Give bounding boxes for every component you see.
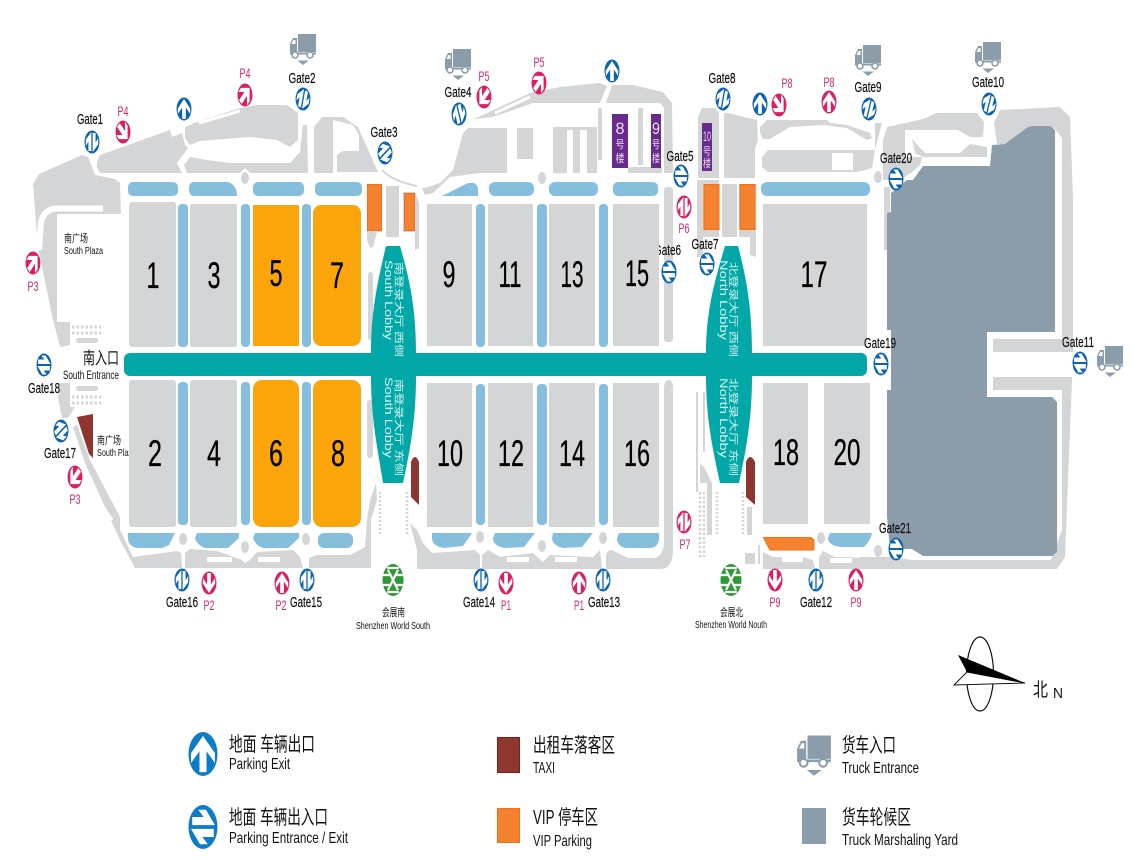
P1 west: P1 — [501, 597, 511, 613]
compass: N — [1053, 685, 1063, 702]
metro station south: 会展南 — [382, 606, 405, 619]
truck marshaling yard — [887, 126, 1057, 556]
gate 7 — [692, 236, 718, 276]
hall 9 — [427, 204, 472, 346]
gate 9: Gate9 — [854, 79, 882, 96]
building 8: 楼 — [616, 151, 624, 165]
gate 5 — [666, 148, 694, 188]
hall 20 — [824, 383, 870, 524]
hall 16 — [613, 383, 659, 527]
north lobby east labels: 北登录大厅 东侧 — [727, 378, 739, 476]
south lobby west labels: South Lobby — [382, 260, 394, 341]
gate 18 — [28, 354, 60, 397]
south lobby east labels: 南登录大厅 东侧 — [392, 379, 404, 476]
P9 west: P9 — [770, 594, 781, 610]
hall 7 — [313, 205, 361, 346]
legend: VIP parking: VIP 停车区 — [533, 806, 598, 829]
P9 east — [849, 568, 863, 610]
legend: parking exit: Parking Exit — [229, 756, 290, 773]
P8 east — [822, 74, 836, 114]
gate 9 — [854, 79, 882, 122]
hall 3 — [190, 204, 237, 347]
metro station south — [356, 564, 430, 632]
hall 17: 17 — [800, 254, 828, 295]
hall 10: 10 — [437, 433, 463, 474]
hall 13: 13 — [560, 254, 584, 295]
P9 west — [768, 568, 782, 610]
exhibition halls — [129, 202, 870, 527]
P2 west — [202, 572, 216, 613]
gate 3: Gate3 — [370, 124, 398, 141]
central teal concourse with lobbies — [124, 246, 867, 483]
label: south plaza south — [97, 433, 136, 459]
gate 1: Gate1 — [77, 111, 103, 128]
legend: truck marshaling yard: 货车轮候区 — [842, 806, 911, 829]
gate 1 — [77, 111, 103, 154]
gate 15: Gate15 — [290, 594, 322, 611]
legend: truck entrance: 货车入口 — [842, 734, 896, 757]
gate 17 — [44, 417, 76, 462]
legend: parking exit: 地面 车辆出口 — [229, 733, 315, 756]
label: south plaza south: South Plaza — [97, 448, 136, 459]
P3 north: P3 — [28, 278, 39, 294]
gate 14 — [463, 568, 495, 611]
gate 11 — [1062, 334, 1094, 374]
legend: truck marshaling yard: Truck Marshaling Yard — [842, 832, 958, 849]
gate 21 — [879, 520, 911, 560]
P2 west: P2 — [204, 597, 215, 613]
P2 east: P2 — [276, 597, 287, 613]
metro station north — [695, 564, 767, 631]
truck icon: gate 11 — [1097, 346, 1123, 377]
hall 14: 14 — [559, 433, 585, 474]
legend: taxi: 出租车落客区 — [533, 734, 615, 757]
gate 13 — [588, 568, 620, 611]
gate 2 — [288, 70, 316, 111]
label: south plaza north — [64, 231, 103, 257]
hall 4 — [190, 380, 237, 527]
hall 11 — [488, 204, 533, 346]
P6: P6 — [678, 220, 690, 236]
gate 17: Gate17 — [44, 445, 76, 462]
gate 11: Gate11 — [1062, 334, 1094, 351]
gate 4 — [444, 84, 472, 127]
P8 west — [770, 75, 793, 119]
gate 3 — [370, 124, 398, 167]
label: south entrance: 南入口 — [83, 349, 119, 368]
hall 11: 11 — [498, 254, 522, 295]
legend: VIP parking — [498, 806, 598, 850]
P7 — [677, 510, 691, 552]
P9 east: P9 — [850, 594, 862, 610]
hall 12: 12 — [498, 433, 524, 474]
hall 2 — [129, 380, 176, 527]
compass: 北 — [1033, 679, 1048, 701]
gate 6 icon — [662, 260, 676, 284]
truck icon: gate 4 — [445, 49, 471, 80]
legend: truck entrance — [797, 734, 919, 777]
P4 west: P4 — [118, 103, 129, 119]
metro station north: 会展北 — [720, 606, 743, 619]
hall 18 — [763, 383, 808, 524]
gate 10 — [972, 74, 1004, 117]
building 9: 9 — [652, 119, 660, 138]
P3 north — [24, 249, 42, 294]
legend: taxi — [498, 734, 615, 777]
gate 20: Gate20 — [880, 150, 912, 167]
hall 17 — [763, 204, 867, 346]
building 10 — [702, 123, 712, 171]
north lobby west labels: 北登录大厅 西侧 — [727, 262, 739, 357]
north lobby west labels — [717, 260, 739, 357]
hall 7: 7 — [330, 255, 344, 296]
building 8 — [612, 114, 628, 168]
legend: taxi: TAXI — [533, 760, 555, 777]
label: south entrance: South Entrance — [63, 368, 119, 382]
VIP parking areas — [368, 184, 814, 550]
south lobby west labels — [382, 260, 404, 357]
taxi drop-off areas — [77, 414, 755, 505]
hall 8 — [313, 380, 361, 527]
P1 east — [572, 572, 586, 613]
hall 14 — [549, 383, 595, 527]
gate 16 — [166, 568, 198, 611]
building 10: 10 — [703, 128, 711, 144]
P3 south — [66, 463, 84, 507]
parking exit centre — [605, 60, 619, 82]
gate 2: Gate2 — [288, 70, 316, 87]
P8 west: P8 — [782, 75, 793, 91]
north lobby west labels: North Lobby — [717, 260, 729, 341]
label: south plaza north: 南广场 — [64, 231, 88, 245]
north lobby east labels: North Lobby — [717, 378, 729, 459]
gate 13: Gate13 — [588, 594, 620, 611]
legend: parking exit — [189, 732, 315, 776]
parking exit west — [177, 98, 191, 120]
gate 8: Gate8 — [708, 70, 736, 87]
P3 south: P3 — [70, 491, 81, 507]
gate 19 — [864, 335, 896, 376]
gate 10: Gate10 — [972, 74, 1004, 91]
gate 7: Gate7 — [692, 236, 718, 253]
gate 15 — [290, 568, 322, 611]
metro station north: Shenzhen World Nouth — [695, 620, 767, 631]
north lobby east labels — [717, 378, 739, 476]
parking exit north — [753, 92, 767, 116]
building 10: 号 — [703, 145, 711, 158]
hall 13 — [549, 204, 595, 346]
P5 west: P5 — [478, 68, 490, 84]
hall 8: 8 — [331, 433, 345, 474]
site grounds: grey roads and plazas — [33, 83, 1073, 569]
legend: parking entrance and exit: 地面 车辆出入口 — [229, 806, 328, 829]
hall 1 — [129, 202, 176, 347]
truck icon: gate 9 — [855, 45, 881, 76]
compass — [954, 637, 1063, 711]
P5 east: P5 — [534, 54, 545, 70]
gate 14: Gate14 — [463, 594, 495, 611]
building 9: 号 — [652, 138, 660, 151]
P4 east — [236, 65, 254, 109]
hall 6 — [253, 380, 299, 527]
hall 2: 2 — [148, 433, 162, 474]
gate 12 — [800, 568, 832, 611]
P5 west — [475, 68, 493, 111]
south lobby east labels — [382, 377, 404, 476]
legend: parking entrance and exit — [189, 805, 348, 849]
truck icon: gate 2 — [290, 34, 316, 65]
hall 5 — [253, 205, 299, 346]
P1 east: P1 — [574, 597, 584, 613]
gate 21: Gate21 — [879, 520, 911, 537]
gate 19: Gate19 — [864, 335, 896, 352]
hall 6: 6 — [269, 433, 283, 474]
legend: parking entrance and exit: Parking Entrance / Exit — [229, 830, 348, 847]
label: south entrance — [63, 349, 119, 382]
label: gate 6: Gate6 — [654, 242, 681, 259]
hall 9: 9 — [442, 254, 456, 295]
building 8: 8 — [616, 119, 624, 138]
hall 3: 3 — [208, 255, 220, 296]
gate 4: Gate4 — [444, 84, 472, 101]
hall 12 — [488, 383, 533, 527]
P4 east: P4 — [240, 65, 251, 81]
gate 16: Gate16 — [166, 594, 198, 611]
gate 20 — [880, 150, 912, 190]
legend: truck entrance: Truck Entrance — [842, 760, 919, 777]
building 10: 楼 — [703, 156, 711, 170]
label: south plaza south: 南广场 — [97, 433, 121, 447]
P2 east — [275, 572, 289, 613]
south lobby east labels: South Lobby — [382, 377, 394, 459]
building 9 — [651, 114, 661, 168]
building 9: 楼 — [652, 151, 660, 165]
hall 15 — [613, 204, 659, 346]
P8 east: P8 — [824, 74, 835, 90]
metro station south: Shenzhen World South — [356, 621, 430, 632]
label: south plaza north: South Plaza — [64, 246, 103, 257]
hall 18: 18 — [773, 432, 799, 473]
hall 15: 15 — [625, 253, 649, 294]
legend: VIP parking: VIP Parking — [533, 833, 592, 850]
hall 20: 20 — [834, 432, 860, 473]
hall 1: 1 — [146, 255, 160, 296]
P5 east — [530, 54, 548, 97]
P6 — [677, 196, 691, 236]
P1 west — [499, 572, 513, 613]
parking strips: light blue — [128, 182, 872, 548]
gate 18: Gate18 — [28, 380, 60, 397]
hall 5: 5 — [270, 253, 282, 294]
gate 5: Gate5 — [666, 148, 694, 165]
building 8: 号 — [616, 138, 624, 151]
hall 10 — [427, 383, 472, 527]
P7: P7 — [680, 536, 691, 552]
hall 16: 16 — [624, 433, 650, 474]
gate 8 — [708, 70, 736, 111]
truck icon: gate 10 — [975, 42, 1001, 73]
P4 west — [114, 103, 132, 146]
south lobby west labels: 南登录大厅 西侧 — [392, 262, 404, 357]
gate 12: Gate12 — [800, 594, 832, 611]
legend: truck marshaling yard — [802, 806, 958, 849]
hall 4: 4 — [207, 433, 221, 474]
